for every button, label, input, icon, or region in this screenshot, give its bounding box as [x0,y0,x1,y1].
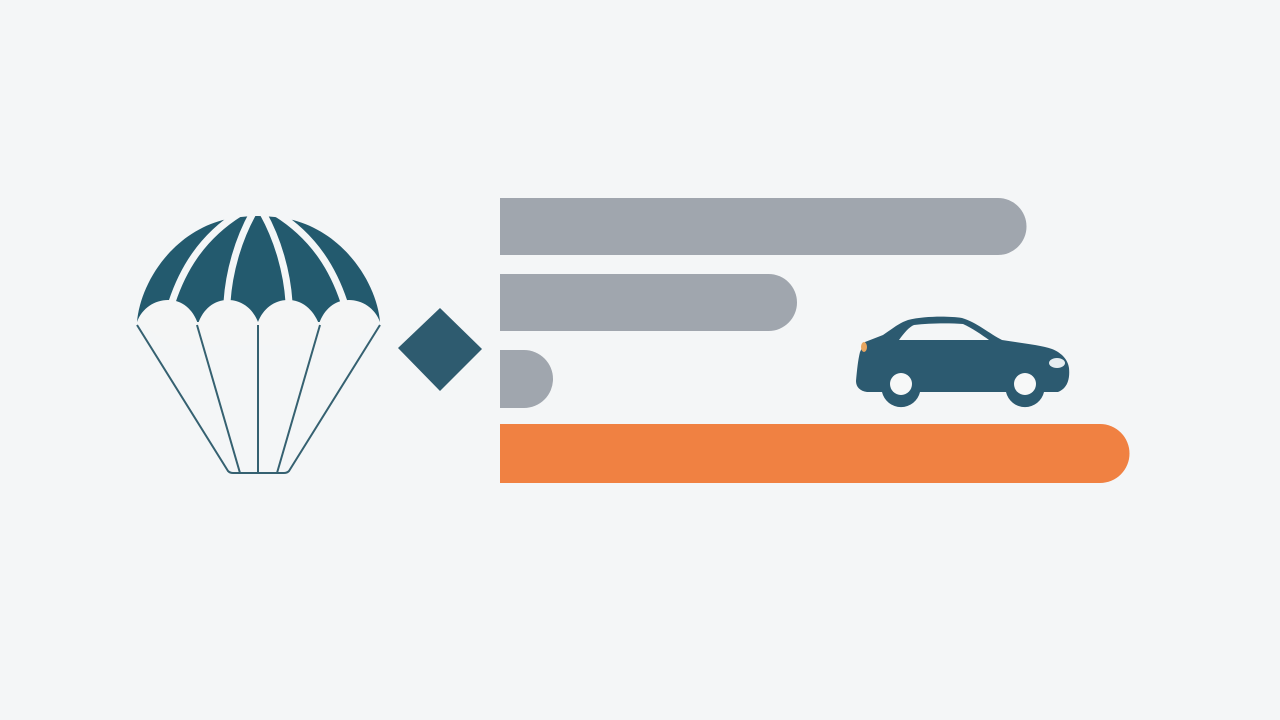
bar: first grey [500,198,1026,255]
bar: orange [500,424,1130,483]
car window [899,323,989,340]
tail light [861,342,867,352]
headlight [1049,358,1065,368]
parachute canopy [137,216,380,322]
car body [856,317,1069,407]
icon: car [856,317,1069,407]
icon: diamond [398,308,482,391]
rear wheel hub [890,373,912,395]
suspension lines [137,325,380,473]
bar: second grey [500,274,797,331]
icon: parachute [137,213,380,473]
canopy ribs [172,213,344,302]
bar: third grey [500,350,553,408]
parachute white lobes [137,300,380,345]
front wheel hub [1014,373,1036,395]
